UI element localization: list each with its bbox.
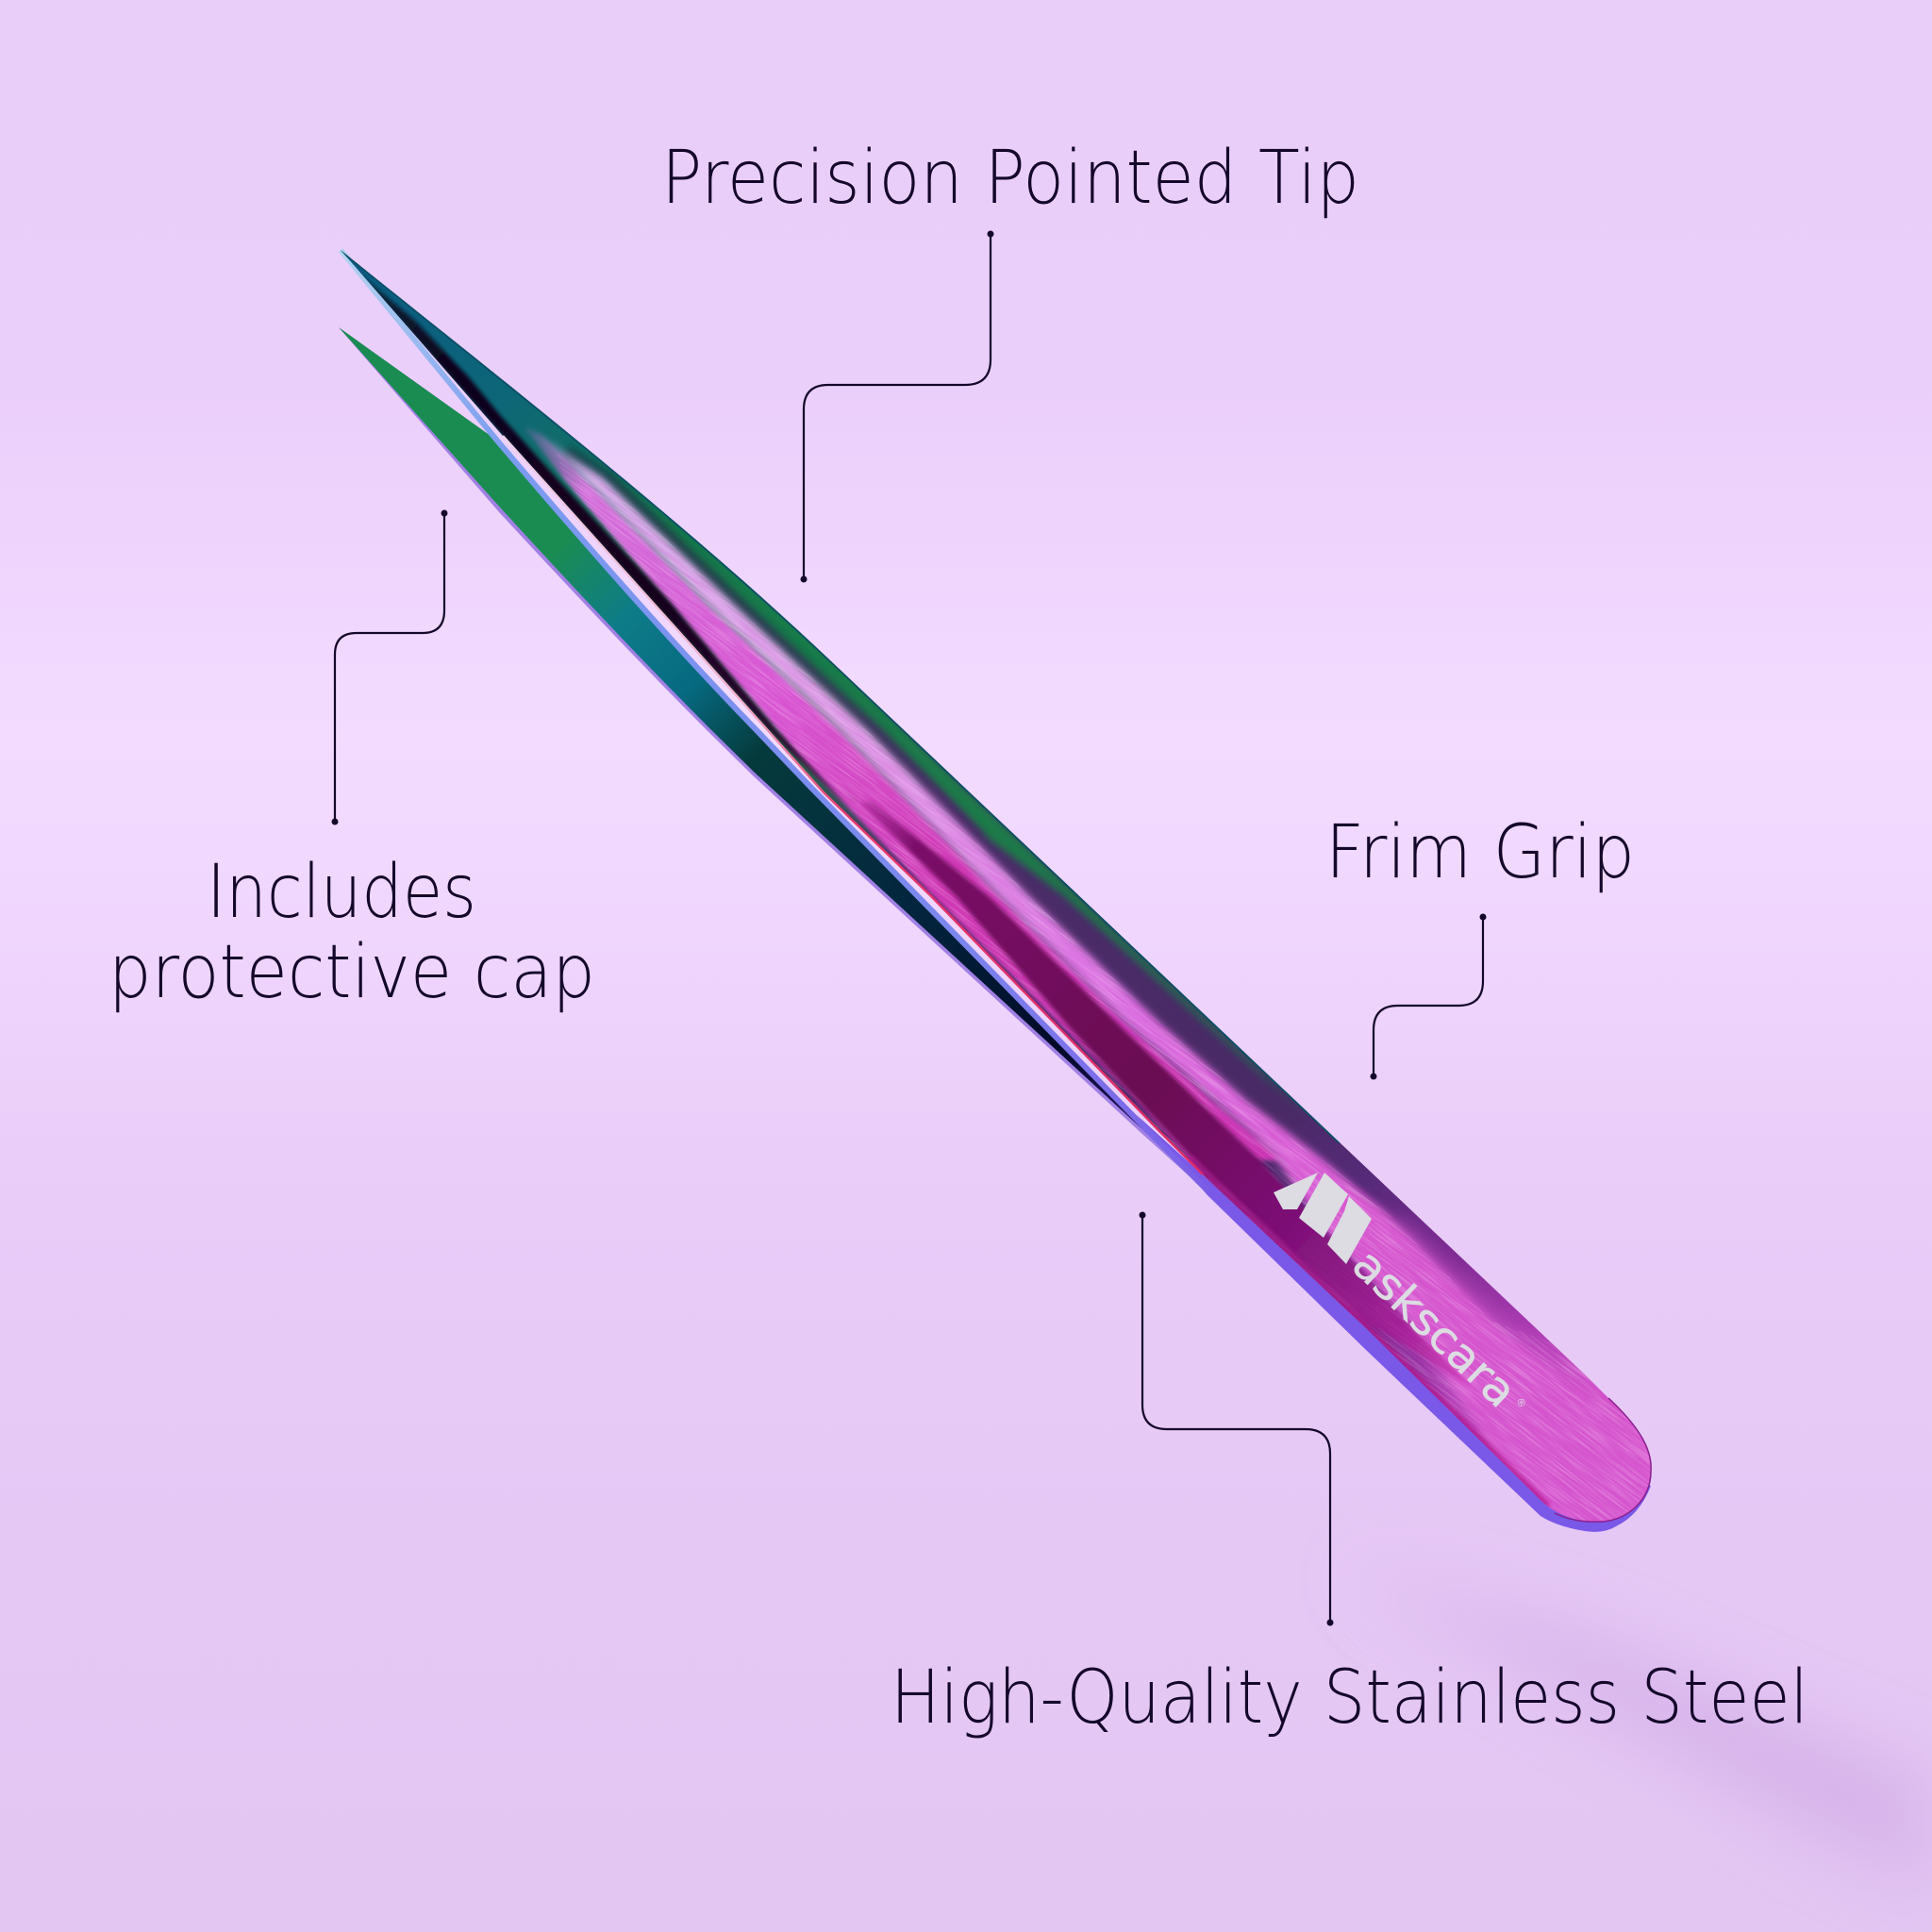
pink band xyxy=(524,426,1283,1160)
connector dot bottom xyxy=(800,575,808,583)
connector dot bottom xyxy=(1326,1619,1334,1626)
brushed metal texture xyxy=(558,454,1651,1521)
logo mark xyxy=(1274,1173,1372,1264)
heading: High-Quality Stainless Steel xyxy=(891,1656,1808,1740)
connector xyxy=(335,513,444,822)
lower magenta lip xyxy=(1189,1158,1547,1507)
registered mark: ® xyxy=(1513,1395,1529,1411)
heading: Includes xyxy=(207,850,476,935)
heading: Frim Grip xyxy=(1325,810,1635,895)
lower blade xyxy=(339,327,1187,1172)
callout: precision pointed tip xyxy=(661,136,1359,583)
red thin seam line xyxy=(503,436,1203,1174)
black inner band near tip xyxy=(354,269,849,807)
upper blade face xyxy=(341,250,1651,1521)
logo xyxy=(1274,1173,1529,1417)
green outer strip xyxy=(806,638,1288,1097)
tweezers product xyxy=(338,248,1652,1532)
dark fringe by highlight xyxy=(566,451,981,840)
callout: frim grip xyxy=(1325,810,1635,1079)
soft floor shadow xyxy=(1340,1566,1932,1887)
callout: stainless steel xyxy=(891,1211,1808,1740)
lower blade edge glow xyxy=(339,327,1191,1177)
connector dot top xyxy=(1479,913,1487,921)
pink highlight band xyxy=(534,431,1580,1521)
connector dot top xyxy=(1140,1211,1145,1219)
connector xyxy=(804,234,991,579)
connector dot bottom xyxy=(1370,1074,1377,1079)
dark edge hairline xyxy=(341,250,1340,1142)
connector dot top xyxy=(441,509,447,517)
connector xyxy=(1374,917,1483,1076)
connector xyxy=(1142,1215,1330,1623)
connector dot bottom xyxy=(332,819,338,824)
blue inner edge line xyxy=(341,250,1208,1191)
handle pink wash xyxy=(1375,1208,1562,1426)
callout: protective cap xyxy=(108,509,595,1015)
connector dot top xyxy=(987,230,994,238)
heading: Precision Pointed Tip xyxy=(661,136,1359,221)
purple underside edge xyxy=(1137,1115,1651,1532)
heading: protective cap xyxy=(108,930,595,1015)
dark wine band xyxy=(835,778,1472,1387)
dark end outline xyxy=(1555,1398,1651,1522)
logo wordmark: askscara xyxy=(1342,1239,1527,1417)
